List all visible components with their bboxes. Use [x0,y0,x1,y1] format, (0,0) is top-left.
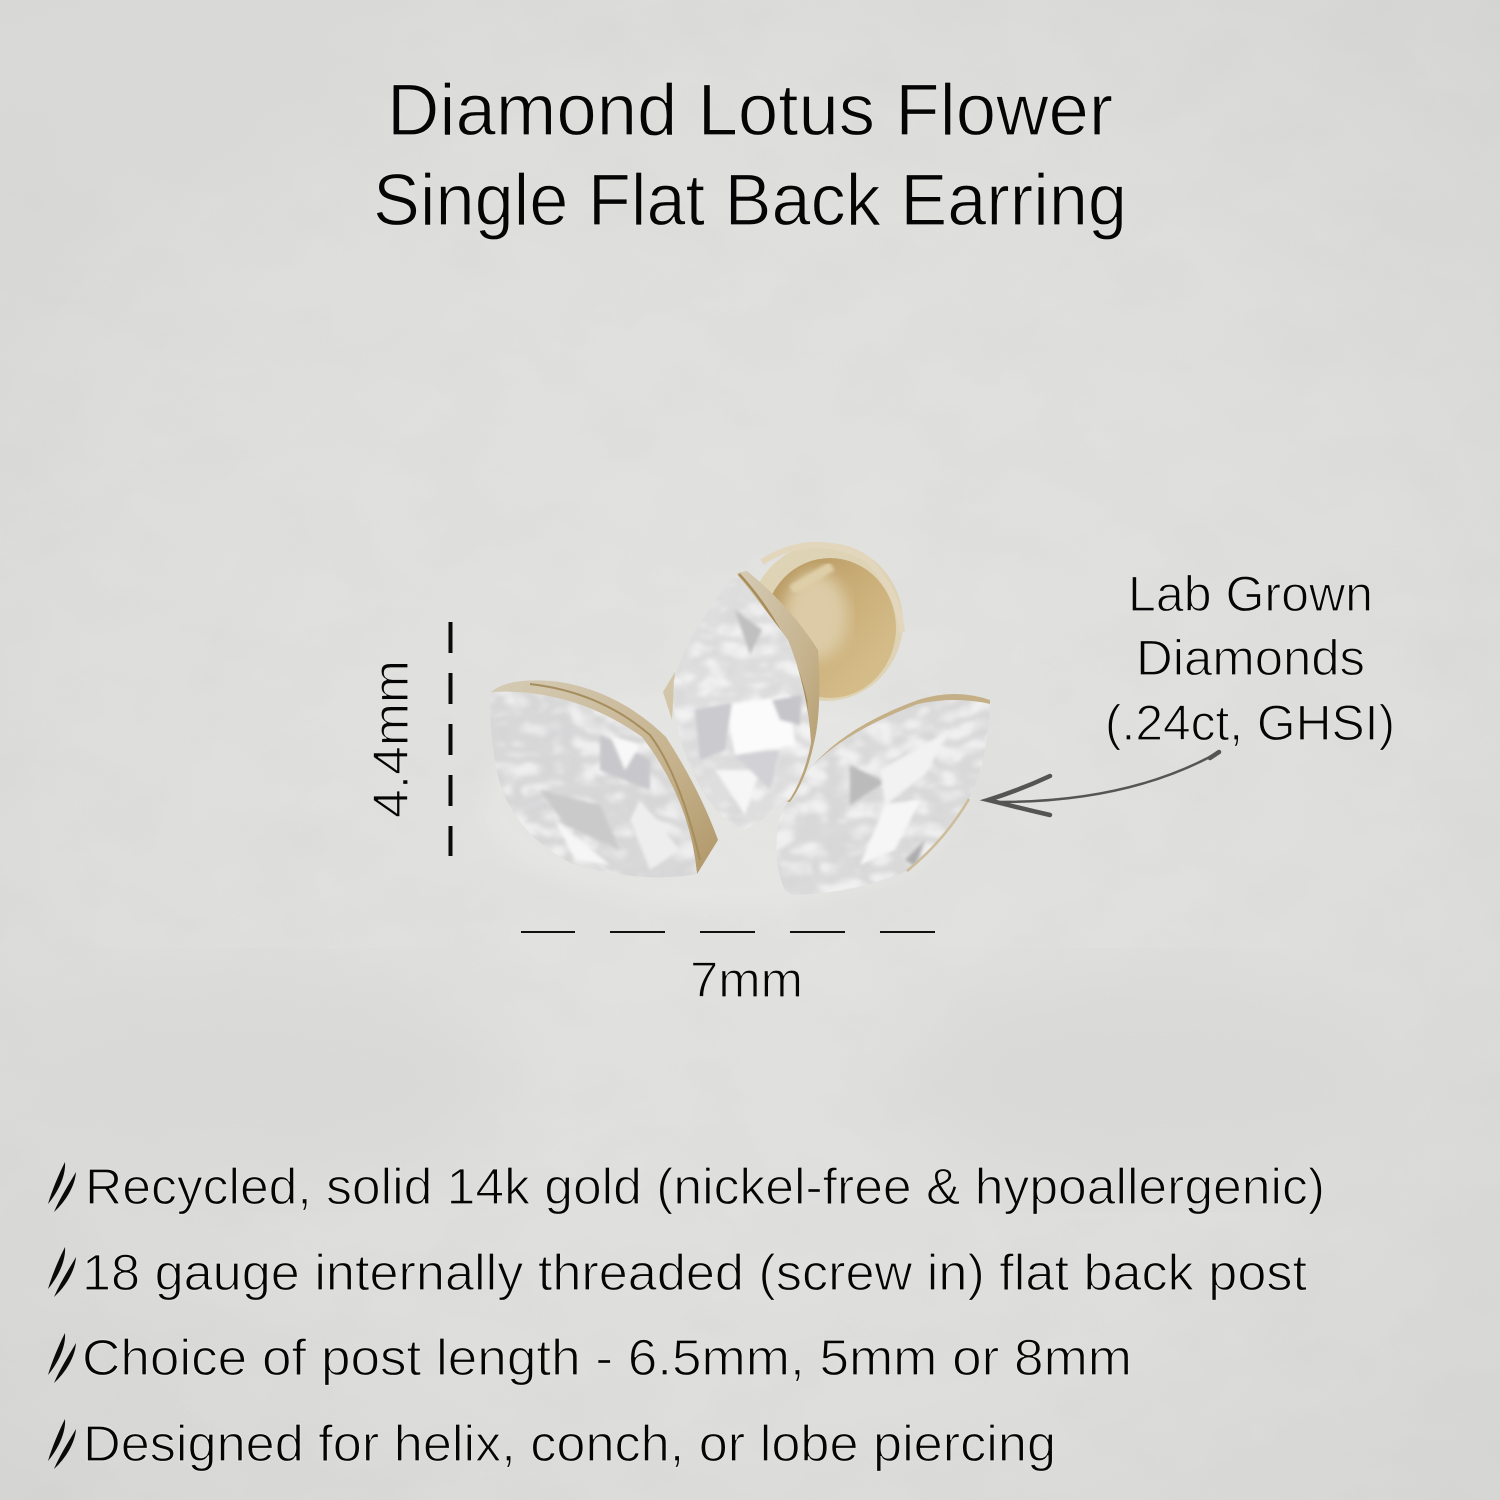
bullet 4: Designed for helix, conch, or lobe piercing [83,1415,1056,1472]
width dimension: 7mm: 7mm [690,952,803,1008]
callout: lab grown diamonds [1105,566,1395,751]
icon: center marquise diamond [663,570,819,835]
callout: lab grown diamonds: (.24ct, GHSI) [1105,695,1395,751]
bullet list [48,1158,1325,1472]
soft halo [480,690,960,910]
bullet 3: Choice of post length - 6.5mm, 5mm or 8mm [82,1329,1132,1386]
icon: double slash [48,1247,76,1297]
icon: double slash [48,1162,76,1212]
icon: gold flat back disc [749,543,903,701]
bullet 2: 18 gauge internally threaded (screw in) flat back post [82,1244,1307,1301]
title [373,70,1127,241]
callout: lab grown diamonds: Diamonds [1136,630,1365,686]
height dimension: 4.4mm [363,622,452,856]
arrow [988,752,1219,815]
earring photo [480,543,995,910]
callout: lab grown diamonds: Lab Grown [1128,566,1373,622]
title: Single Flat Back Earring [373,160,1127,241]
height dimension: 4.4mm: 4.4mm [363,660,419,818]
bullet 1: Recycled, solid 14k gold (nickel-free & hypoallergenic) [85,1158,1325,1215]
title: Diamond Lotus Flower [387,70,1113,151]
icon: right marquise diamond [770,690,995,900]
icon: double slash [48,1333,76,1383]
icon: left marquise diamond [490,680,718,878]
icon: double slash [48,1419,76,1469]
